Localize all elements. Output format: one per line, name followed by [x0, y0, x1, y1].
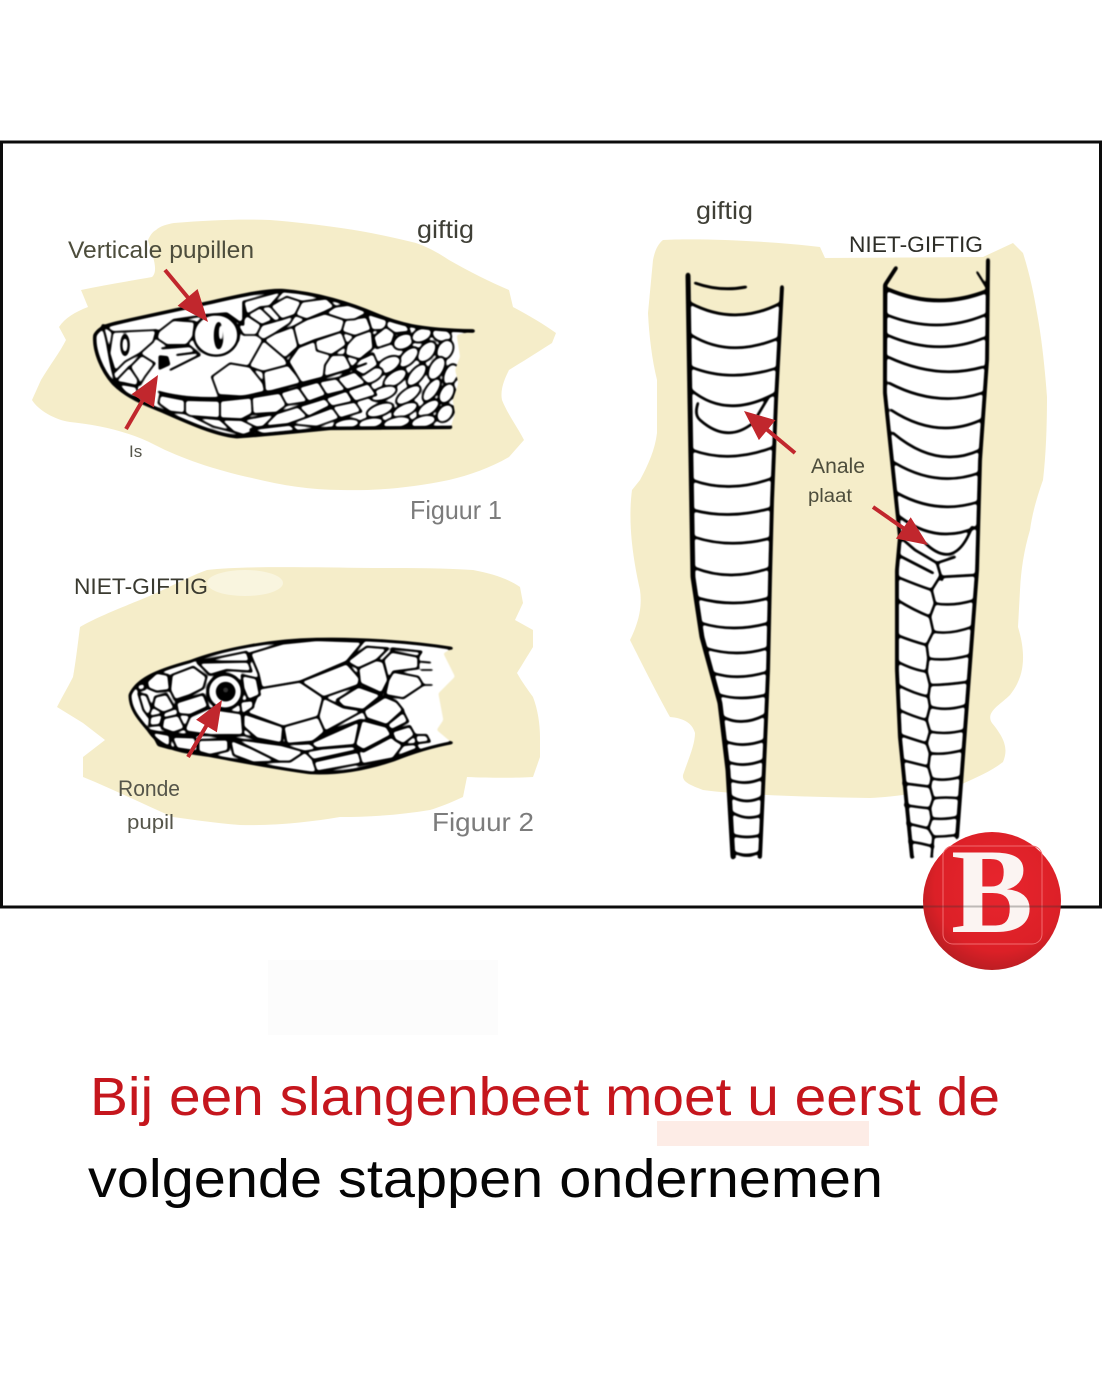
label: anal plate: Anale	[811, 455, 865, 478]
heading	[88, 1067, 1000, 1209]
panel: background blob head 1	[32, 220, 556, 490]
logo badge: B	[951, 825, 1033, 959]
belly: venomous snake	[688, 275, 782, 857]
arrow: round pupil	[188, 700, 222, 757]
heading: Bij een slangenbeet moet u eerst de	[90, 1067, 1000, 1127]
logo badge	[923, 825, 1061, 970]
frame	[2, 142, 1100, 907]
infographic canvas	[0, 140, 1102, 1208]
arrow: anal plate left	[744, 411, 795, 453]
arrow: vertical pupil	[165, 270, 208, 322]
label: figure 1: Figuur 1	[410, 495, 502, 525]
label: non-venomous belly: NIET-GIFTIG	[849, 232, 983, 257]
label: pit: Is	[129, 442, 142, 461]
label: round pupil: Ronde	[118, 776, 180, 801]
label: figure 2: Figuur 2	[432, 807, 534, 837]
label: venomous belly: giftig	[696, 197, 753, 225]
heading: volgende stappen ondernemen	[88, 1149, 883, 1209]
label: venomous head: giftig	[417, 216, 474, 244]
panel: background blob head 2	[57, 567, 540, 825]
pale fade beside heading	[207, 570, 283, 596]
label: round pupil: pupil	[127, 812, 174, 834]
label: round pupil	[118, 776, 180, 834]
arrow: anal plate right	[873, 507, 928, 545]
faint background smudges	[268, 960, 869, 1146]
snake head: non-venomous, figure 2	[130, 639, 455, 773]
belly: non-venomous snake	[885, 260, 988, 857]
label: vertical pupils: Verticale pupillen	[68, 237, 254, 264]
label: anal plate	[808, 455, 865, 507]
label: non-venomous head: NIET-GIFTIG	[74, 574, 208, 599]
snake head: venomous, figure 1	[95, 291, 473, 437]
panel: background blob belly	[630, 239, 1047, 798]
label: anal plate: plaat	[808, 486, 853, 507]
arrow: pit	[126, 375, 158, 429]
